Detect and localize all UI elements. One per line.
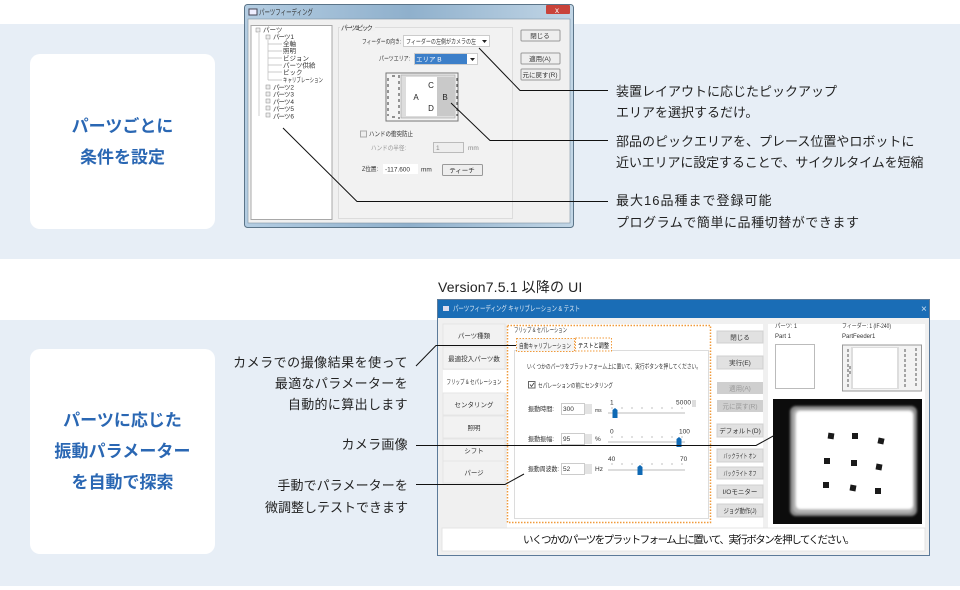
feeder area diagram: B [442, 93, 448, 102]
heading card: vibration parameter search: 振動パラメーター [54, 442, 191, 461]
vibration frequency row: 52 [563, 466, 571, 473]
tree panel: パーツ 4 [273, 98, 294, 106]
callout: pickup area selection [616, 84, 837, 120]
sub tab: auto calibration: 自動キャリブレーション [519, 341, 571, 350]
dialog buttons [521, 30, 560, 80]
command buttons: 適用(A) [729, 384, 751, 392]
band: top section background [0, 24, 960, 259]
feeder thumbnail: PartFeeder1 [842, 334, 876, 340]
command buttons: I/Oモニター [723, 487, 757, 496]
vibration time row: 振動時間: [528, 404, 554, 413]
callout: automatic calculation [233, 355, 408, 412]
left tabs: パーツ種類 [458, 331, 491, 340]
hand collision and Z position controls [360, 129, 482, 176]
heading card: per-part settings: パーツごとに [72, 117, 173, 136]
left tabs: 照明 [468, 424, 481, 432]
command buttons: 閉じる [730, 334, 750, 342]
callout: manual tuning: 手動でパラメーターを [277, 478, 408, 493]
vibration amplitude row: 0 [610, 428, 614, 436]
client area [438, 318, 929, 555]
tree panel: パーツ 6 [273, 112, 294, 120]
heading card: per-part settings: 条件を設定 [80, 148, 165, 167]
command buttons: バックライト オフ [724, 470, 756, 478]
feeder area diagram: A [413, 93, 419, 102]
screenshot: calibration and test dialog [437, 299, 930, 556]
feeder area diagram: C [428, 81, 434, 90]
group box: pick settings: フィーダーの向き: [362, 36, 401, 46]
hand collision and Z position controls: ハンドの衝突防止 [369, 129, 413, 138]
callout: manual tuning [265, 478, 408, 515]
hand collision and Z position controls: mm [421, 166, 432, 174]
left tabs [443, 324, 507, 483]
tree panel: パーツ 2 [273, 84, 294, 92]
right info panel background [768, 324, 925, 528]
callout: pickup area selection: エリアを選択するだけ。 [616, 105, 758, 120]
tree panel: ピック [283, 68, 302, 76]
orange dotted flip and separation area: フリップ & セパレーション [514, 326, 567, 334]
left tabs: センタリング [454, 400, 494, 409]
vibration time row: 1 [610, 400, 614, 406]
callout: 16 part types: プログラムで簡単に品種切替ができます [616, 215, 860, 230]
tree panel: パーツ供給 [283, 60, 316, 70]
vibration frequency row [528, 456, 688, 475]
close button: x [555, 6, 559, 15]
dialog buttons: 閉じる [530, 32, 550, 40]
callout: 16 part types [616, 193, 860, 230]
callout: camera image: カメラ画像 [341, 437, 408, 452]
group box: pick settings: フィーダーの左側がカメラの左 [406, 36, 476, 46]
group box: pick settings: パーツ1: ピック [341, 24, 373, 32]
command buttons: デフォルト(D) [719, 426, 761, 435]
callout: automatic calculation: カメラでの撮像結果を使って [233, 355, 408, 370]
feeder thumbnail [842, 322, 922, 391]
title bar text [249, 7, 313, 17]
title bar: × [921, 304, 927, 315]
vibration time row: ms [595, 408, 602, 414]
heading card: vibration parameter search: パーツに応じた [63, 411, 182, 430]
dialog buttons: 元に戻す(R) [522, 71, 558, 79]
vibration amplitude row: 95 [563, 436, 571, 443]
vibration frequency row: 振動周波数: [528, 464, 559, 473]
sub tab: test and adjust [576, 338, 612, 351]
vibration time row [528, 400, 696, 418]
callout: cycle time reduction: 近いエリアに設定することで、サイクルタイムを短縮 [616, 155, 923, 170]
feeder thumbnail: フィーダー: 1 (IF-240) [842, 322, 891, 330]
tree panel [251, 26, 332, 220]
feeder area diagram: D [428, 104, 434, 113]
centering checkbox [528, 380, 613, 390]
hand collision and Z position controls: ティーチ [449, 166, 475, 174]
left tabs: 最適投入パーツ数 [448, 354, 500, 363]
status message bar: いくつかのパーツをプラットフォーム上に置いて、実行ボタンを押してください。 [523, 533, 855, 546]
part thumbnail: Part 1 [775, 334, 792, 340]
band: bottom section background [0, 320, 960, 586]
command buttons: ジョグ動作(J) [724, 506, 756, 515]
sub tab: auto calibration [516, 338, 574, 352]
tree panel: パーツ [263, 26, 282, 34]
vibration frequency row: Hz [595, 466, 603, 473]
callout: automatic calculation: 自動的に算出します [288, 397, 408, 412]
group box: pick settings: パーツエリア: [379, 54, 410, 62]
version label: Version7.5.1 以降の UI [438, 279, 582, 295]
part thumbnail: パーツ: 1 [775, 323, 798, 330]
close button [546, 5, 570, 15]
part thumbnail [775, 323, 814, 388]
vibration amplitude row: 100 [679, 428, 690, 436]
vibration time row: 300 [563, 406, 574, 413]
heading card: vibration parameter search [30, 349, 215, 554]
heading card: per-part settings [30, 54, 215, 229]
callout: manual tuning: 微調整しテストできます [265, 500, 408, 515]
tree panel: キャリブレーション [283, 75, 323, 84]
tree panel: 全軸 [283, 39, 296, 48]
feeder area diagram [386, 73, 458, 121]
command buttons: バックライト オン [724, 452, 756, 460]
title bar [438, 300, 929, 318]
left tabs: パージ [464, 469, 484, 477]
tree panel: 照明 [283, 47, 296, 55]
dialog buttons: 適用(A) [529, 54, 551, 63]
command buttons [717, 331, 763, 517]
centering checkbox: セパレーションの前にセンタリング [538, 380, 613, 390]
vibration frequency row: 40 [608, 456, 616, 463]
callout: cycle time reduction: 部品のピックエリアを、プレース位置やロボットに [616, 134, 914, 149]
hand collision and Z position controls: 1 [436, 145, 440, 152]
command buttons: 実行(E) [729, 358, 751, 367]
callout: pickup area selection: 装置レイアウトに応じたピックアップ [616, 84, 837, 99]
hand collision and Z position controls: mm [468, 145, 479, 152]
vibration frequency row: 70 [680, 456, 688, 463]
vibration amplitude row: 振動振幅: [528, 434, 554, 443]
callout: 16 part types: 最大16品種まで登録可能 [616, 193, 772, 208]
orange dotted flip and separation area: いくつかのパーツをプラットフォーム上に置いて、実行ボタンを押してください。 [527, 362, 701, 370]
title bar: パーツフィーディング キャリブレーション & テスト [453, 303, 580, 313]
heading card: vibration parameter search: を自動で探索 [72, 473, 174, 492]
group box: pick settings [338, 24, 512, 218]
title bar text: パーツフィーディング [259, 7, 313, 17]
screenshot: part feeding dialog [244, 4, 574, 228]
hand collision and Z position controls: -117.600 [385, 166, 410, 174]
tree panel: パーツ 1 [273, 33, 294, 41]
tree panel: ビジョン [283, 54, 309, 62]
callout: cycle time reduction [616, 134, 923, 170]
vibration amplitude row [528, 428, 690, 447]
left tabs: フリップ & セパレーション [446, 378, 502, 386]
left tabs: シフト [464, 447, 484, 455]
group box: pick settings: エリア B [416, 56, 442, 64]
tree panel: パーツ 3 [273, 90, 294, 98]
callout: automatic calculation: 最適なパラメーターを [275, 376, 408, 391]
sub tab: test and adjust: テストと調整 [578, 340, 609, 350]
vibration time row: 5000 [676, 400, 691, 406]
command buttons: 元に戻す(R) [722, 402, 758, 410]
hand collision and Z position controls: Z位置: [362, 164, 378, 173]
tree panel: パーツ 5 [273, 105, 294, 113]
vibration amplitude row: % [595, 436, 601, 443]
camera image [773, 399, 922, 524]
orange dotted flip and separation area [508, 326, 710, 522]
hand collision and Z position controls: ハンドの半径: [371, 143, 406, 152]
status message bar [442, 528, 925, 551]
